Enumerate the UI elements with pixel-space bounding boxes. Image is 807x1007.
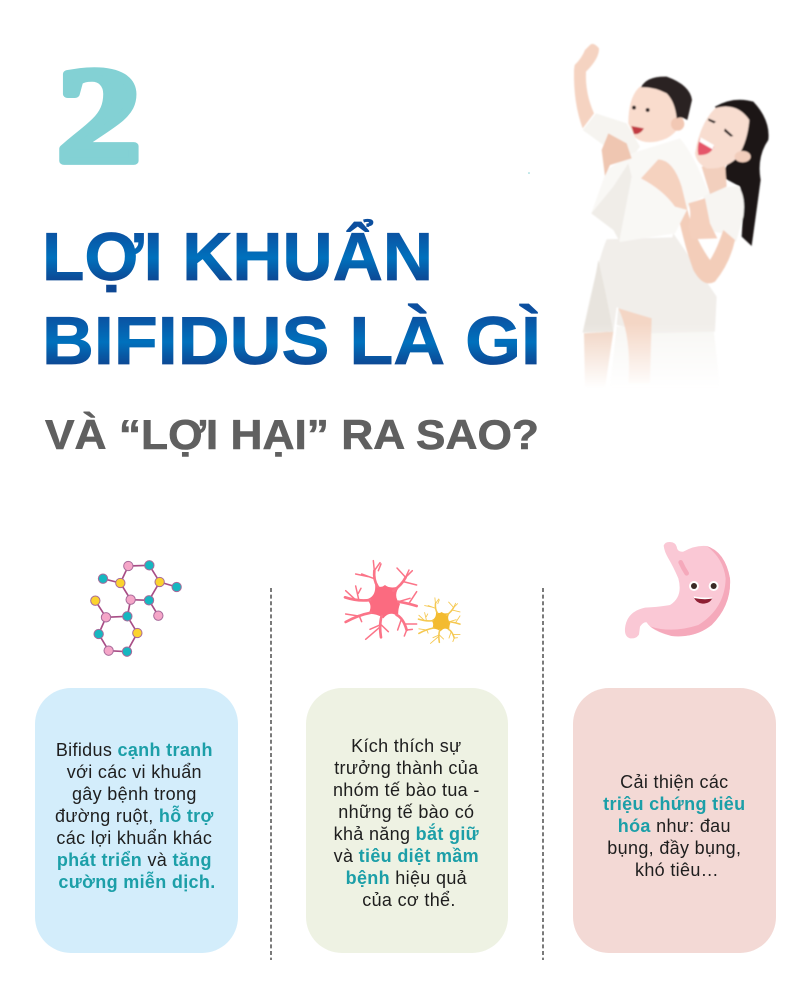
text: card one: gây bệnh trong xyxy=(72,784,197,804)
text: card two: nhóm tế bào tua - xyxy=(333,780,480,800)
text: card two: trưởng thành của xyxy=(334,758,479,778)
big number 2: 2 xyxy=(57,41,141,191)
small dot xyxy=(528,172,530,174)
text: card three: khó tiêu… xyxy=(635,860,719,880)
panel: digestion xyxy=(573,688,776,953)
text: card two: khả năng bắt giữ xyxy=(334,824,479,844)
title xyxy=(42,218,541,379)
text: card one: Bifidus cạnh tranh xyxy=(56,740,213,760)
icon: immune cells xyxy=(345,561,460,643)
icon: stomach xyxy=(625,542,730,638)
text: card two: và tiêu diệt mầm xyxy=(334,846,479,866)
text: card one: phát triển và tăng xyxy=(57,850,212,870)
text: card one: với các vi khuẩn xyxy=(67,762,202,782)
icon: molecule xyxy=(91,561,181,656)
text: card three: triệu chứng tiêu xyxy=(603,794,745,814)
title: LỢI KHUẨN xyxy=(42,218,433,295)
panel: dendritic cells xyxy=(306,688,508,953)
text: card one: cường miễn dịch. xyxy=(58,871,216,892)
text: card three: Cải thiện các xyxy=(620,772,728,792)
text: card two: những tế bào có xyxy=(338,802,474,822)
divider xyxy=(271,588,543,960)
title: BIFIDUS LÀ GÌ xyxy=(42,303,541,379)
text: card two: Kích thích sự xyxy=(351,736,462,756)
text: card two: của cơ thể. xyxy=(362,890,456,910)
text: card two: bệnh hiệu quả xyxy=(346,868,467,888)
text: card one: đường ruột, hỗ trợ xyxy=(55,806,214,826)
panel: competition xyxy=(35,688,238,953)
text: card one: các lợi khuẩn khác xyxy=(56,828,212,848)
subtitle: VÀ “LỢI HẠI” RA SAO? xyxy=(45,411,539,458)
text: card three: bụng, đầy bụng, xyxy=(607,838,741,858)
text: card three: hóa như: đau xyxy=(618,816,731,836)
photo: mother and child xyxy=(574,44,769,388)
